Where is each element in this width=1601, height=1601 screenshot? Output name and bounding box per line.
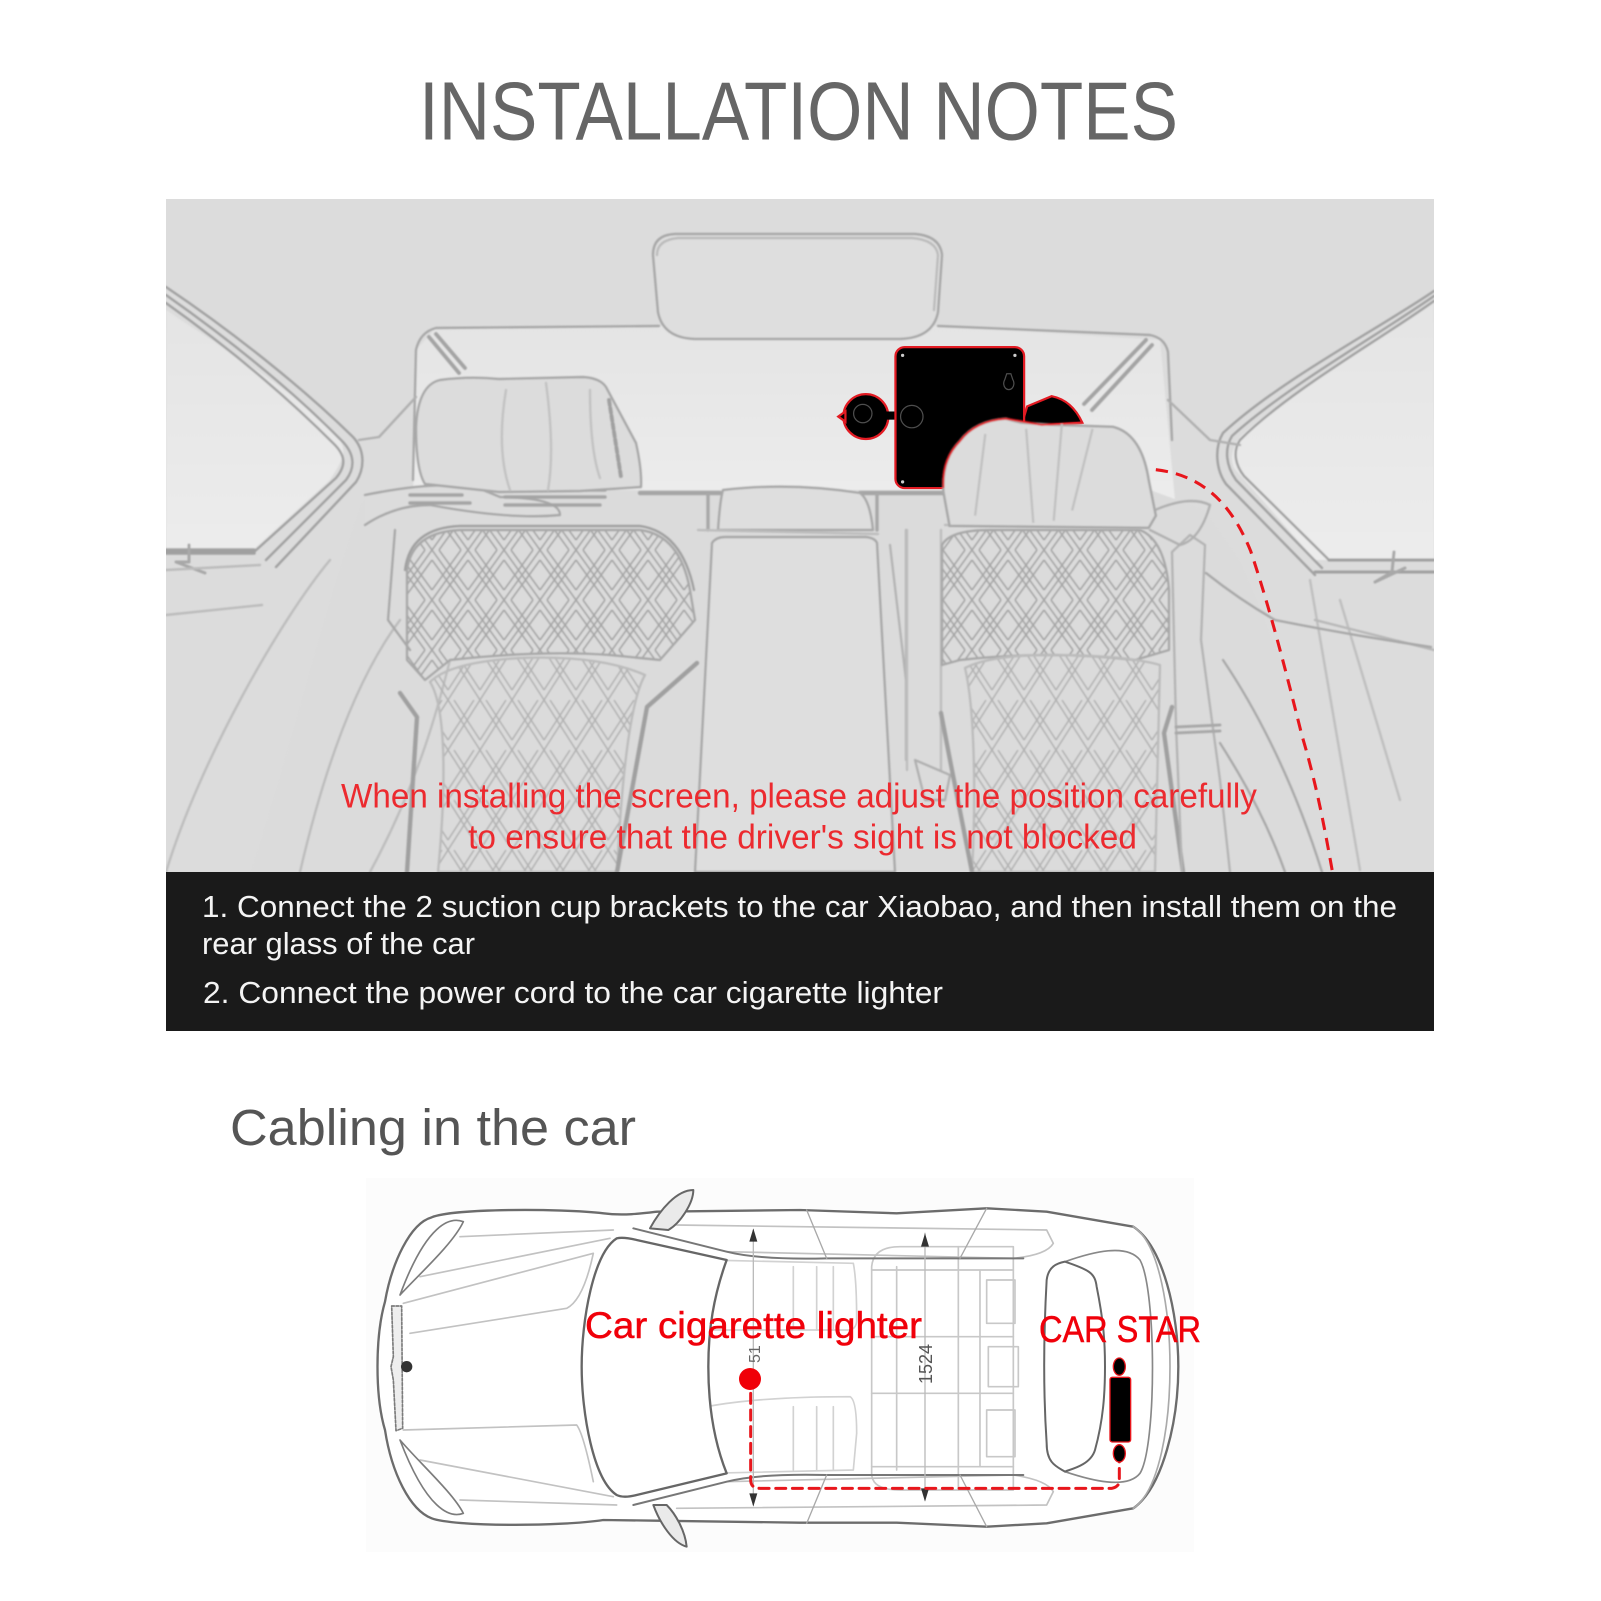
cigarette lighter dot bbox=[739, 1368, 761, 1390]
warning text bbox=[341, 778, 1258, 856]
car line drawing bbox=[377, 1190, 1178, 1547]
panel: instruction bar bbox=[166, 872, 1434, 1031]
panel: car top view diagram bbox=[366, 1178, 1201, 1552]
left quilted back bbox=[407, 530, 695, 680]
seats bbox=[707, 1260, 857, 1473]
windshield bbox=[582, 1238, 727, 1497]
dimension label: 51: 51 bbox=[747, 1345, 764, 1363]
label: car star: CAR STAR bbox=[1039, 1309, 1201, 1350]
dimension arrows bbox=[753, 1230, 925, 1505]
right quilted back bbox=[942, 530, 1169, 665]
warning text: When installing the screen, please adjust the position carefully bbox=[341, 778, 1258, 816]
rear window glass bbox=[413, 326, 1175, 500]
warning text: to ensure that the driver's sight is not blocked bbox=[468, 818, 1137, 856]
shelf bbox=[640, 491, 945, 495]
step 1 text: rear glass of the car bbox=[202, 926, 475, 961]
panel: rear seat interior illustration bbox=[166, 199, 1434, 872]
left shoulder trim bbox=[365, 485, 560, 525]
centre headrest bbox=[718, 487, 873, 530]
step 2 text: 2. Connect the power cord to the car cigarette lighter bbox=[203, 975, 943, 1010]
left headrest bbox=[416, 377, 641, 492]
centre belt bbox=[907, 530, 941, 770]
car body bbox=[377, 1208, 1178, 1527]
dimension label: 1524: 1524 bbox=[916, 1344, 936, 1384]
scaled overlay bbox=[341, 347, 1332, 872]
rear view mirror bbox=[653, 234, 942, 339]
car interior line drawing bbox=[166, 234, 1434, 872]
side mirrors bbox=[650, 1190, 693, 1547]
front grille bbox=[391, 1306, 403, 1431]
right seat belt bbox=[1172, 535, 1230, 872]
left suction cup bbox=[836, 393, 894, 440]
headlights bbox=[400, 1220, 463, 1515]
rear hatch bbox=[1065, 1250, 1152, 1482]
rear window frame bbox=[413, 326, 1172, 480]
right headrest bbox=[943, 419, 1156, 528]
step 1 text: 1. Connect the 2 suction cup brackets to the car Xiaobao, and then install them on the bbox=[202, 889, 1397, 924]
step 1 text bbox=[202, 889, 1397, 961]
title: INSTALLATION NOTES bbox=[419, 64, 1178, 158]
arrow: dashed cable bbox=[1156, 470, 1332, 872]
right suction cup bbox=[1021, 396, 1082, 427]
label: car cigarette lighter: Car cigarette lighter bbox=[585, 1305, 922, 1346]
seat upholstery side shapes bbox=[496, 490, 1174, 500]
infographic canvas bbox=[166, 82, 1434, 1548]
right shoulder trim bbox=[1150, 501, 1210, 545]
right pillar strip bbox=[1217, 291, 1434, 575]
screen bbox=[895, 347, 1024, 488]
heading: cabling: Cabling in the car bbox=[230, 1099, 636, 1156]
centre armrest bbox=[695, 537, 895, 872]
right side window bbox=[1232, 301, 1434, 560]
rear window bbox=[1044, 1262, 1105, 1472]
left side window bbox=[166, 310, 343, 550]
hood creases bbox=[403, 1225, 1053, 1508]
left pillar strip bbox=[166, 287, 362, 567]
CAR STAR device bbox=[1110, 1358, 1131, 1462]
cable route bbox=[751, 1393, 1119, 1488]
pillars and roof bbox=[633, 1208, 1023, 1527]
logo bbox=[401, 1361, 412, 1372]
icon: screen with suction cups bbox=[838, 347, 1082, 488]
